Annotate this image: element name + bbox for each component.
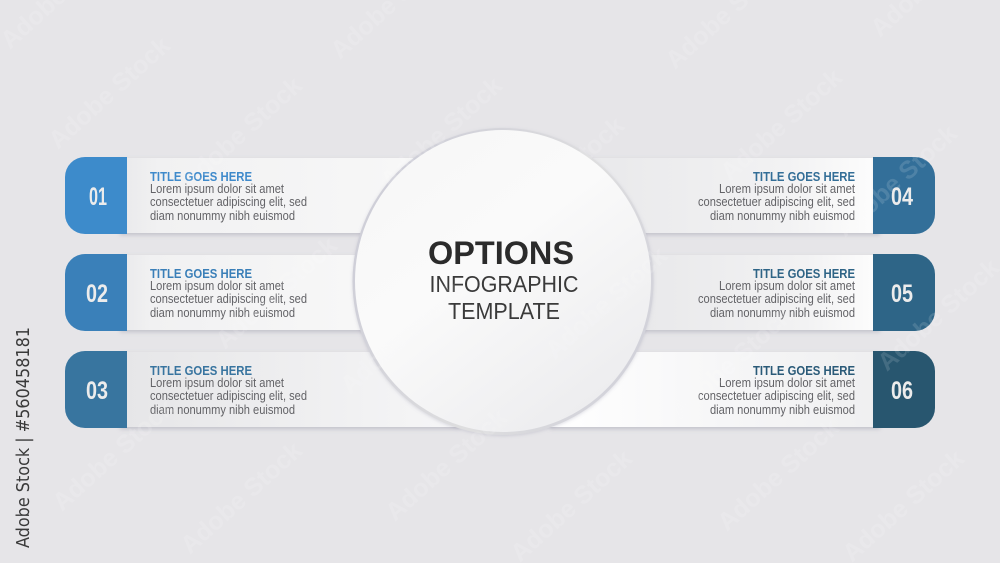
- text 06: consectetuer adipiscing elit, sed: [698, 389, 855, 403]
- circle subtitle: [430, 271, 578, 324]
- text 03: TITLE GOES HERE: [150, 364, 252, 378]
- text 05: TITLE GOES HERE: [753, 267, 855, 281]
- panel: option 03: [65, 351, 460, 428]
- panel: option 01: [65, 157, 440, 234]
- text 01: [150, 170, 307, 223]
- watermarks: Adobe Stock: [175, 436, 308, 559]
- tab 03: [65, 351, 127, 428]
- text 05: consectetuer adipiscing elit, sed: [698, 292, 855, 306]
- text 04: Lorem ipsum dolor sit amet: [719, 182, 855, 196]
- tab 05: 05: [891, 280, 913, 308]
- watermarks: Adobe Stock: [375, 71, 508, 194]
- text 05: Lorem ipsum dolor sit amet: [719, 279, 855, 293]
- watermarks: Adobe Stock: [665, 301, 798, 424]
- watermarks: Adobe Stock: [715, 63, 848, 186]
- watermarks: Adobe Stock: [712, 413, 845, 536]
- tab 03: 03: [86, 377, 108, 405]
- text 04: TITLE GOES HERE: [753, 170, 855, 184]
- watermarks: Adobe Stock: [335, 276, 468, 399]
- central circle: [352, 128, 654, 435]
- text 06: [698, 364, 855, 417]
- circle heading: OPTIONS: [428, 235, 574, 271]
- text 03: Lorem ipsum dolor sit amet: [150, 376, 284, 390]
- text 05: [698, 267, 855, 320]
- watermarks: Adobe Stock: [380, 403, 513, 526]
- text 03: consectetuer adipiscing elit, sed: [150, 389, 307, 403]
- tab 05: [873, 254, 935, 331]
- tab 01: 01: [89, 183, 107, 211]
- panel: option 06: [550, 351, 935, 428]
- circle subtitle: INFOGRAPHIC: [430, 271, 578, 297]
- text 02: TITLE GOES HERE: [150, 267, 252, 281]
- stock id caption: Adobe Stock | #560458181: [13, 327, 34, 548]
- watermarks: Adobe Stock: [175, 71, 308, 194]
- text 02: diam nonummy nibh euismod: [150, 306, 295, 320]
- tab 04: 04: [891, 183, 913, 211]
- text 03: [150, 364, 307, 417]
- watermarks: Adobe Stock: [210, 231, 343, 354]
- text 01: consectetuer adipiscing elit, sed: [150, 195, 307, 209]
- text 02: consectetuer adipiscing elit, sed: [150, 292, 307, 306]
- panel: option 04: [570, 157, 935, 234]
- panel: option 02: [65, 254, 380, 331]
- text 02: Lorem ipsum dolor sit amet: [150, 279, 284, 293]
- watermarks: Adobe Stock: [540, 241, 673, 364]
- watermarks: Adobe Stock: [497, 111, 630, 234]
- text 04: [698, 170, 855, 223]
- text 06: TITLE GOES HERE: [753, 364, 855, 378]
- text 01: Lorem ipsum dolor sit amet: [150, 182, 284, 196]
- tab 02: 02: [86, 280, 108, 308]
- tab 01: [65, 157, 127, 234]
- text 02: [150, 267, 307, 320]
- tab 06: [873, 351, 935, 428]
- tab 06: 06: [891, 377, 913, 405]
- text 05: diam nonummy nibh euismod: [710, 306, 855, 320]
- text 06: diam nonummy nibh euismod: [710, 403, 855, 417]
- tab 02: [65, 254, 127, 331]
- watermarks: Adobe Stock: [830, 119, 963, 242]
- text 03: diam nonummy nibh euismod: [150, 403, 295, 417]
- text 04: consectetuer adipiscing elit, sed: [698, 195, 855, 209]
- watermarks: Adobe Stock: [47, 393, 180, 516]
- text 06: Lorem ipsum dolor sit amet: [719, 376, 855, 390]
- text 04: diam nonummy nibh euismod: [710, 209, 855, 223]
- text 01: diam nonummy nibh euismod: [150, 209, 295, 223]
- tab 04: [873, 157, 935, 234]
- watermarks: Adobe Stock: [43, 31, 176, 154]
- text 01: TITLE GOES HERE: [150, 170, 252, 184]
- panel: option 05: [630, 254, 935, 331]
- circle subtitle: TEMPLATE: [448, 298, 560, 324]
